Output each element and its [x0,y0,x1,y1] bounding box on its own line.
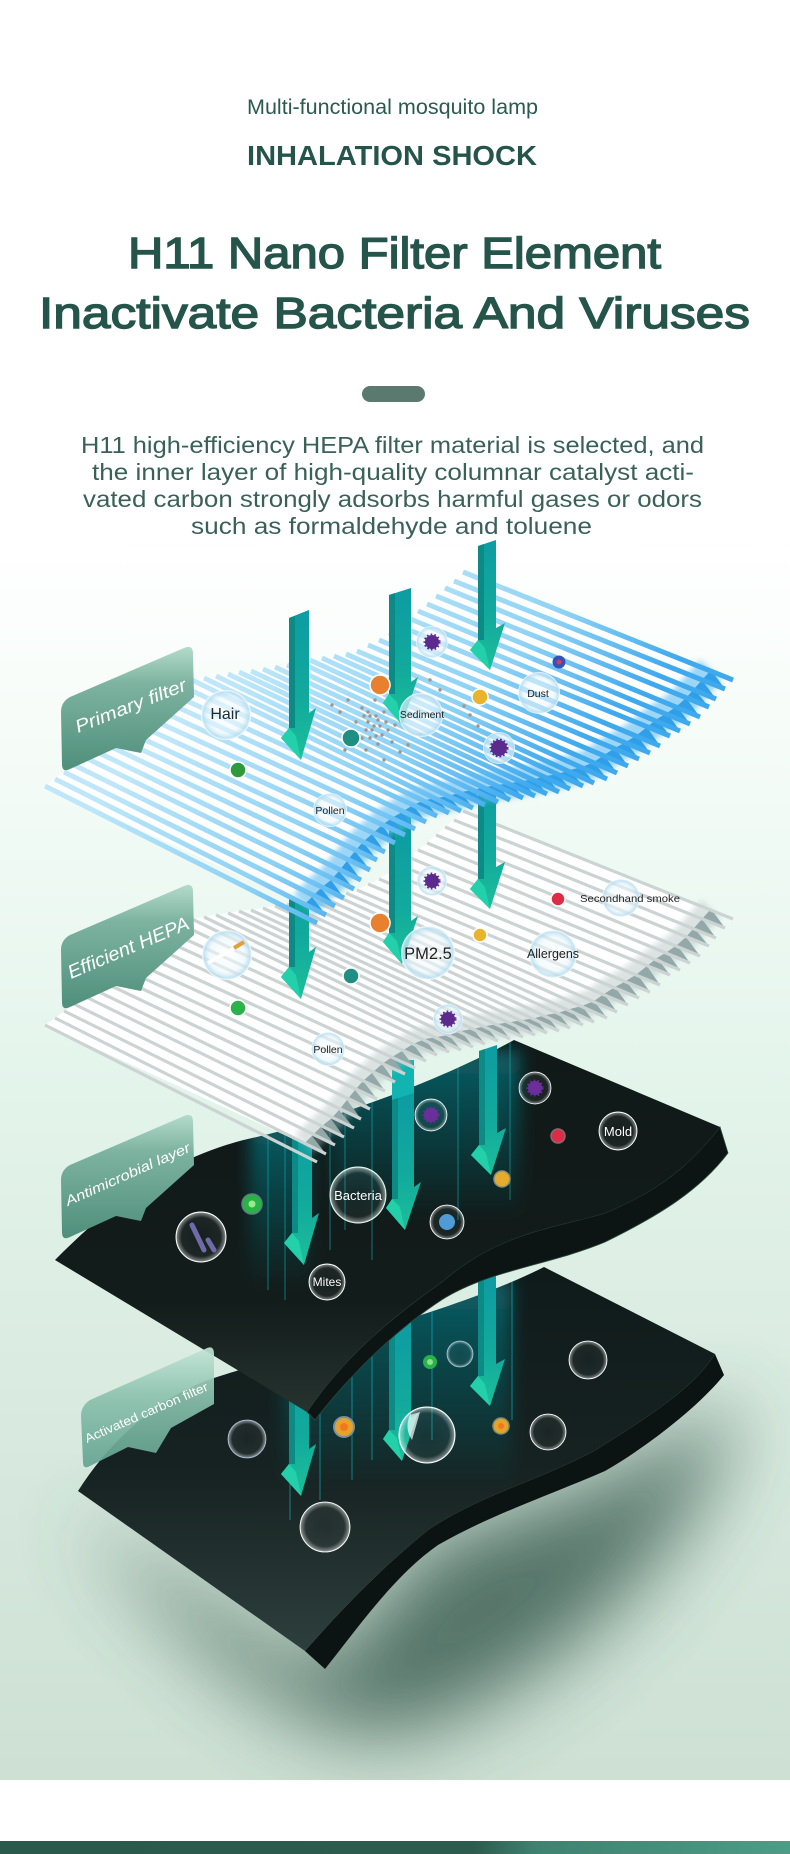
PM2.5 bubble [401,926,455,980]
mold bubble [599,1112,637,1150]
description paragraph: vated carbon strongly adsorbs harmful gases or odors [83,486,702,512]
bacteria bubble: Bacteria [334,1188,383,1203]
allergens bubble: Allergens [527,947,579,961]
secondhand smoke bubble: Secondhand smoke [580,893,680,905]
particle: teal [343,968,359,984]
arrow: layer 2 left [281,849,316,999]
rod bacteria bubble [176,1212,226,1262]
layer 3: antimicrobial sheet [55,1040,728,1420]
description paragraph: H11 high-efficiency HEPA filter material is selected, and [81,432,704,458]
particle: green [242,1194,262,1214]
particle: green [230,1000,246,1016]
virus bubble [416,626,448,658]
particle: green [423,1355,437,1369]
dust bubble [518,672,560,714]
pollen bubble: Pollen [313,1044,343,1056]
virus bubble [483,732,515,764]
cigarette bubble [202,930,252,980]
particle: green [230,762,246,778]
title [39,229,750,338]
heading: product line: Multi-functional mosquito lamp [247,96,538,119]
sediment bubble: Sediment [400,709,444,721]
divider pill [362,386,425,402]
bubble [228,1420,266,1458]
particle: orange [493,1418,509,1434]
label: efficient HEPA: Efficient HEPA [65,913,193,984]
bubbles on carbon sheet [228,1341,607,1552]
particle: blue-red [552,656,566,668]
arrow: layer 3 left [284,1115,319,1265]
bottom green band [0,1841,790,1854]
dust bubble: Dust [527,688,549,700]
allergens bubble [527,930,579,978]
white gap below panel [0,1780,790,1841]
description paragraph [81,432,704,539]
contaminants on primary sheet [201,626,566,827]
particle: red [551,892,565,906]
label: primary filter [61,647,194,770]
PM2.5 bubble: PM2.5 [404,945,452,963]
arrow: layer 2 right [470,779,505,909]
virus bubble [519,1072,551,1104]
arrow: layer 1 middle [383,588,418,725]
hair bubble [201,690,251,740]
layer 2: HEPA pleated sheet [45,811,733,1162]
description paragraph: such as formaldehyde and toluene [191,513,592,539]
drop shadow beneath filter stack [70,1400,740,1735]
virus bubble [433,1004,463,1034]
pollen bubble [311,1032,345,1066]
arrow: layer 3 middle [386,1060,421,1230]
bubble [300,1502,350,1552]
particle: teal [342,729,360,747]
arrow: layer 2 middle [383,815,418,964]
label: activated carbon filter: Activated carbon filter [83,1380,210,1446]
arrow: layer 1 right [470,540,505,670]
bubble [447,1341,473,1367]
arrow: layer 4 left [281,1346,316,1496]
bubble [530,1414,566,1450]
secondhand smoke bubble [580,879,680,917]
arrow: layer 4 right [470,1240,505,1406]
particle: yellow [473,928,487,942]
layer 1: primary pleated sheet [45,572,733,923]
bubbles on antimicrobial sheet [176,1072,637,1300]
blue cell bubble [430,1205,464,1239]
arrow: layer 1 left [281,610,316,760]
arrow: layer 3 right [471,1045,506,1175]
title: H11 Nano Filter Element [128,229,661,278]
label: activated carbon filter [81,1347,214,1467]
particle: yellow [472,689,488,705]
layer 4: activated carbon sheet [78,1267,724,1669]
label: antimicrobial layer [61,1115,194,1238]
arrow: layer 4 middle [383,1280,418,1461]
heading: inhalation shock: INHALATION SHOCK [247,140,537,171]
virus bubble [417,866,447,896]
large bubble [399,1407,455,1463]
contaminants on HEPA sheet [202,866,680,1066]
hair bubble: Hair [210,706,240,723]
virus bubble [415,1099,447,1131]
bubble [569,1341,607,1379]
particle: orange [370,913,390,933]
gradient backdrop panel [0,540,790,1780]
pollen bubble [313,793,347,827]
label: primary filter: Primary filter [72,674,190,737]
debris dust [332,680,478,760]
description paragraph: the inner layer of high-quality columnar catalyst acti- [92,459,694,485]
mites bubble [309,1264,345,1300]
mites bubble: Mites [313,1275,341,1289]
sediment bubble [399,693,444,737]
pollen bubble: Pollen [315,805,345,817]
bacteria bubble [330,1167,386,1223]
label: efficient HEPA [61,885,194,1008]
particle: yellow [494,1171,510,1187]
particle: orange [370,675,390,695]
mold bubble: Mold [604,1124,632,1139]
title: Inactivate Bacteria And Viruses [39,289,750,338]
particle: orange [334,1417,354,1437]
label: antimicrobial layer: Antimicrobial layer [62,1139,194,1209]
particle: red [551,1129,565,1143]
